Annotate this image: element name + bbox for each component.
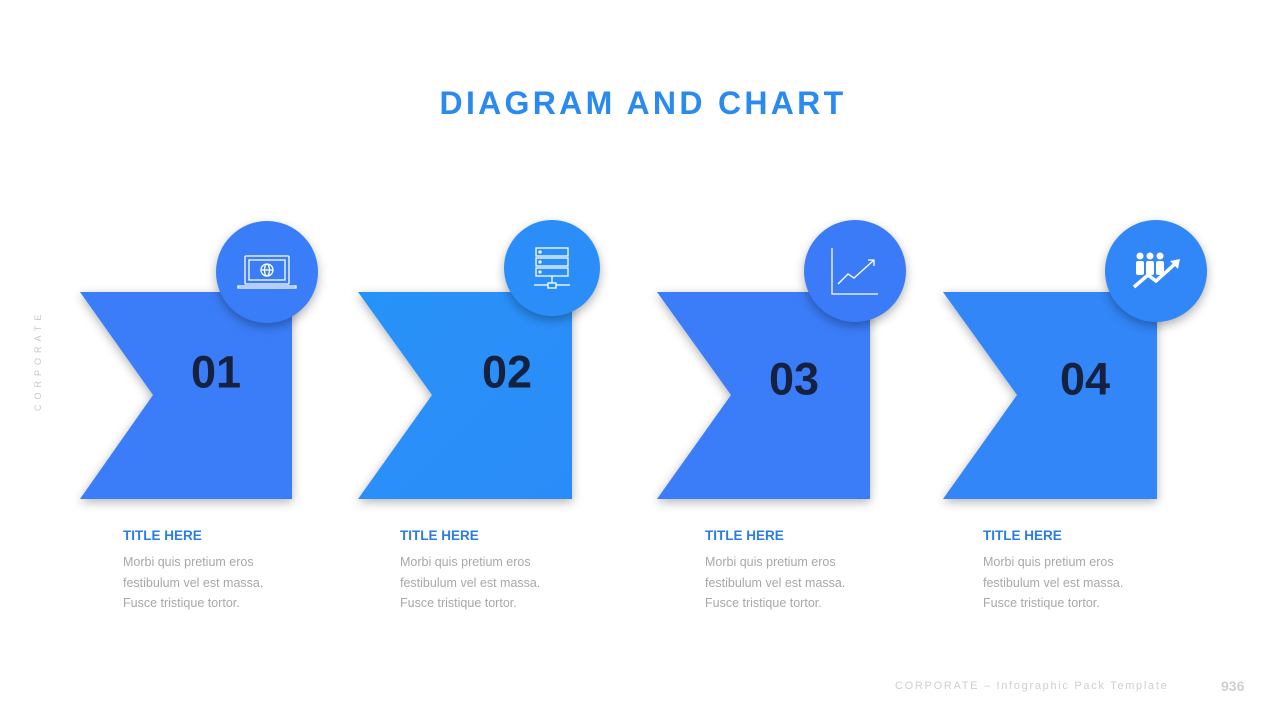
- side label: CORPORATE: [33, 310, 43, 411]
- text block 4: Fusce tristique tortor.: [983, 596, 1100, 610]
- icon circle 2: server: [504, 220, 600, 316]
- shape 1: [80, 292, 292, 499]
- text block 3: Fusce tristique tortor.: [705, 596, 822, 610]
- text block 3: [705, 528, 845, 610]
- text block 1: festibulum vel est massa.: [123, 576, 263, 590]
- text block 3: Morbi quis pretium eros: [705, 555, 836, 569]
- text block 4: [983, 528, 1123, 610]
- text block 2: TITLE HERE: [400, 528, 479, 543]
- text block 2: festibulum vel est massa.: [400, 576, 540, 590]
- text block 2: Morbi quis pretium eros: [400, 555, 531, 569]
- text block 1: Fusce tristique tortor.: [123, 596, 240, 610]
- number 03: 03: [769, 354, 819, 404]
- text block 4: Morbi quis pretium eros: [983, 555, 1114, 569]
- shape 2: [358, 292, 572, 499]
- text block 2: Fusce tristique tortor.: [400, 596, 517, 610]
- footer: CORPORATE – Infographic Pack Template: [895, 680, 1168, 692]
- text block 2: [400, 528, 540, 610]
- text block 4: festibulum vel est massa.: [983, 576, 1123, 590]
- number 02: 02: [482, 346, 532, 398]
- shape 4: [943, 292, 1157, 499]
- icon circle 1: laptop globe: [216, 221, 318, 323]
- text block 4: TITLE HERE: [983, 528, 1062, 543]
- text block 3: TITLE HERE: [705, 528, 784, 543]
- text block 1: [123, 528, 263, 610]
- title: DIAGRAM AND CHART: [440, 85, 846, 121]
- page number: 936: [1221, 678, 1244, 694]
- icon circle 3: line chart: [804, 220, 906, 322]
- number 01: 01: [191, 346, 241, 398]
- icon circle 4: people growth: [1105, 220, 1207, 322]
- text block 1: Morbi quis pretium eros: [123, 555, 254, 569]
- text block 3: festibulum vel est massa.: [705, 576, 845, 590]
- shape 3: [657, 292, 870, 499]
- text block 1: TITLE HERE: [123, 528, 202, 543]
- number 04: 04: [1060, 354, 1110, 404]
